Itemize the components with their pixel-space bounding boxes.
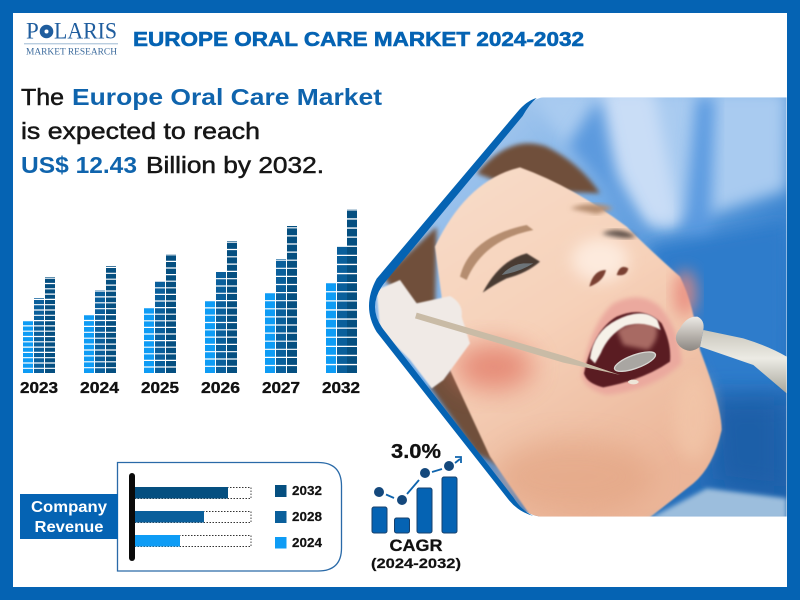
logo: Polaris Market Research: LARIS — [54, 18, 117, 44]
panel: company revenue — [20, 462, 342, 571]
year labels: 2023 — [20, 380, 58, 397]
label: company revenue: Revenue — [34, 519, 104, 536]
scrubs background — [360, 90, 787, 517]
mouth — [582, 297, 682, 395]
logo: Polaris Market Research: P — [26, 18, 39, 44]
legend: 2032 — [292, 484, 322, 498]
bars 2026 — [210, 241, 232, 373]
bar chart: yearly market growth — [28, 209, 352, 373]
label: company revenue: Company — [31, 499, 107, 516]
patient bib — [647, 488, 787, 520]
glove — [377, 280, 470, 388]
bars 2024 — [89, 266, 111, 373]
face — [435, 167, 722, 520]
year labels: 2025 — [141, 380, 179, 397]
hair — [383, 143, 600, 467]
bars 2032 — [331, 209, 352, 373]
headline text: Europe Oral Care Market — [72, 84, 382, 110]
bars 2023 — [28, 277, 50, 373]
blue hexagon border — [369, 98, 537, 516]
bars 2027 — [270, 226, 292, 373]
dental mirror probe — [415, 313, 620, 375]
year labels: 2026 — [201, 380, 240, 397]
CAGR period: (2024-2032) — [371, 555, 461, 571]
headline text: Billion by 2032. — [146, 152, 324, 178]
CAGR icon: bars and trend line — [372, 457, 461, 533]
year labels: 2024 — [80, 380, 119, 397]
legend: 2028 — [292, 510, 322, 524]
CAGR label: CAGR — [390, 536, 442, 555]
legend — [275, 484, 322, 550]
headline text: US$ 12.43 — [21, 152, 137, 178]
year labels: 2027 — [262, 380, 300, 397]
cheek and lower jaw shading — [453, 270, 713, 513]
headline text: The — [21, 84, 64, 110]
headline text: is expected to reach — [21, 118, 260, 144]
headline text — [21, 84, 382, 178]
year labels: 2032 — [322, 380, 360, 397]
dental handpiece — [676, 317, 787, 393]
title: EUROPE ORAL CARE MARKET 2024-2032 — [133, 28, 584, 51]
year labels — [20, 380, 360, 397]
bars 2025 — [149, 254, 171, 373]
CAGR callout — [371, 441, 461, 571]
label: company revenue — [20, 494, 118, 539]
eyes, brows and nose — [460, 204, 637, 293]
panel outline — [118, 462, 342, 571]
photo: dental patient in hexagon frame — [360, 90, 787, 520]
CAGR value: 3.0% — [391, 441, 441, 463]
horizontal bar chart — [129, 473, 251, 561]
logo: Polaris Market Research — [24, 18, 118, 56]
logo: Polaris Market Research: MARKET RESEARCH — [26, 46, 118, 56]
legend: 2024 — [292, 536, 322, 550]
